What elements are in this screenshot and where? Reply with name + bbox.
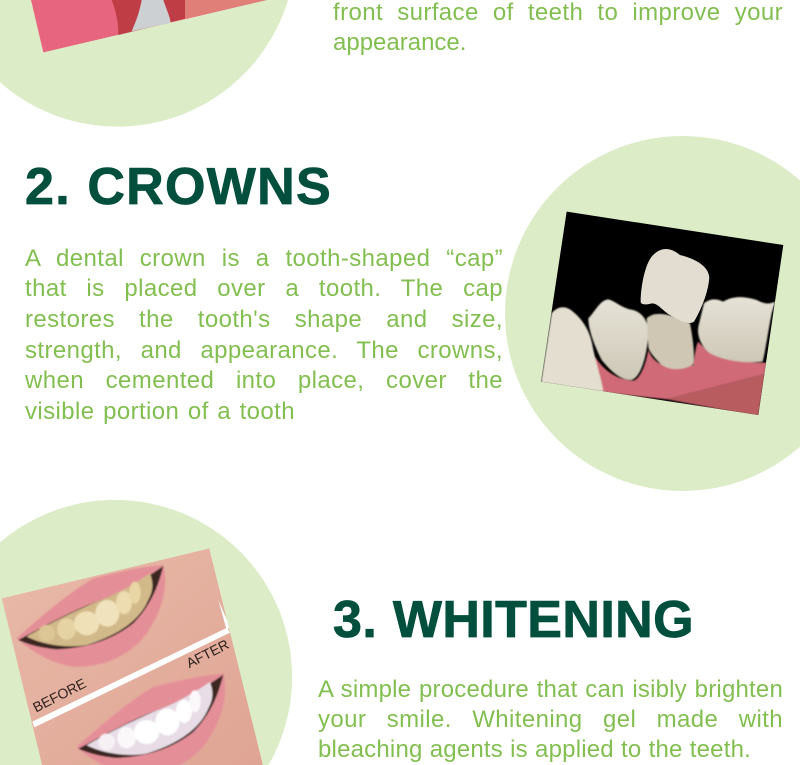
heading: whitening: 3. WHITENING — [333, 591, 694, 649]
circle: veneers background — [0, 0, 288, 127]
text block: crowns description: when cemented into place, cover the — [25, 367, 503, 394]
photo: crown on tooth — [541, 212, 783, 417]
text block: veneers description: appearance. — [333, 29, 466, 56]
label: before: BEFORE — [30, 675, 89, 715]
circle: whitening background — [0, 500, 292, 765]
circle: crowns background — [505, 136, 800, 491]
text block: crowns description: strength, and appearance. The crowns, — [25, 337, 503, 364]
text block: whitening description — [318, 676, 783, 763]
text block: whitening description: A simple procedure that can isibly brighten — [318, 676, 783, 703]
text block: crowns description — [25, 245, 503, 425]
after smile — [77, 674, 225, 765]
photo: before and after smile — [2, 548, 263, 765]
before smile — [17, 565, 165, 667]
heading: crowns: 2. CROWNS — [25, 158, 332, 216]
label: after: AFTER — [183, 636, 232, 671]
text block: veneers description — [333, 0, 783, 56]
text block: crowns description: A dental crown is a tooth-shaped “cap” — [25, 245, 503, 272]
text block: whitening description: your smile. Whitening gel made with — [318, 706, 783, 733]
divider — [32, 628, 230, 727]
text block: crowns description: restores the tooth's shape and size, — [25, 306, 503, 333]
text block: crowns description: that is placed over a tooth. The cap — [25, 275, 503, 302]
text block: crowns description: visible portion of a tooth — [25, 398, 295, 425]
text block: whitening description: bleaching agents is applied to the teeth. — [318, 736, 751, 763]
photo: veneers — [31, 0, 267, 52]
